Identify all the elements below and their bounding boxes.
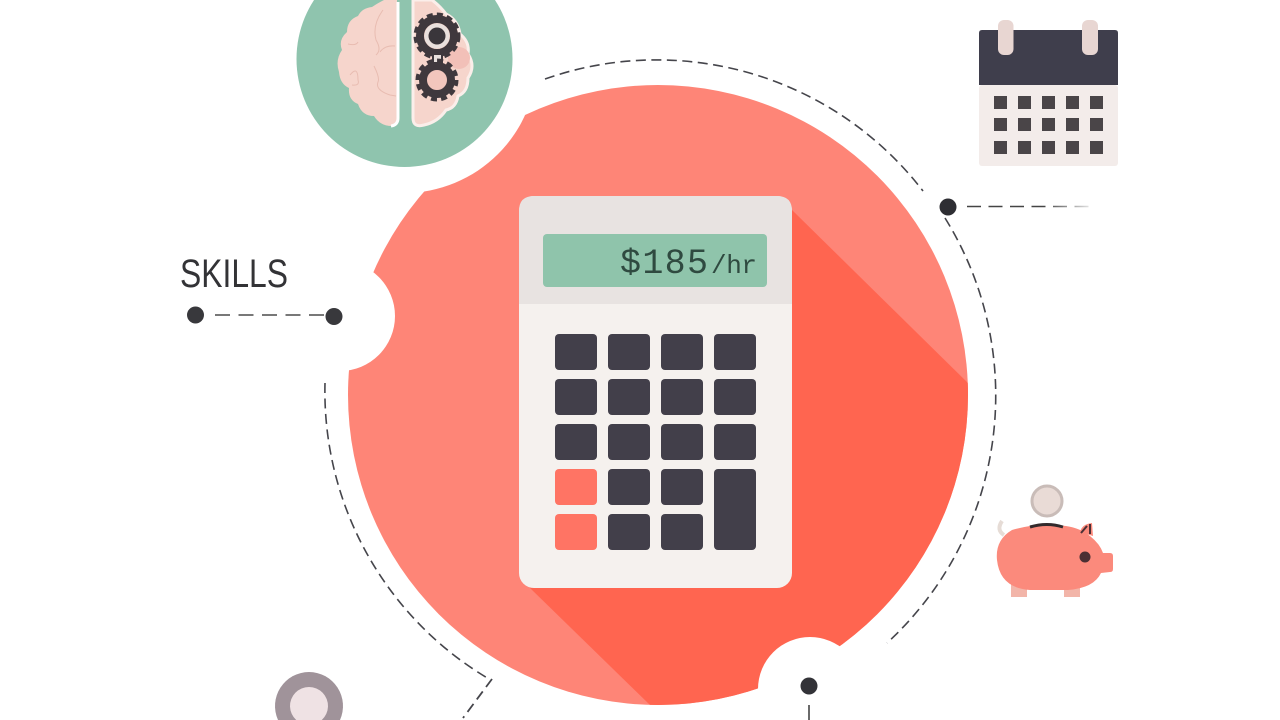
calculator top band — [519, 196, 792, 304]
display value: $185 — [620, 244, 708, 284]
left brain lobe — [338, 0, 397, 126]
calculator drop shadow — [530, 210, 972, 705]
notch: skills — [285, 261, 395, 371]
keypad — [555, 334, 756, 550]
calculator — [519, 196, 792, 588]
icon: brain with gears — [296, 0, 512, 167]
pig body — [997, 525, 1113, 590]
notch: brain — [271, 0, 537, 193]
lower gear — [418, 60, 456, 100]
bottom connector — [800, 678, 818, 720]
infographic canvas — [182, 0, 1118, 720]
left lobe highlight — [391, 2, 398, 126]
right lobe shaded patch — [448, 47, 470, 69]
upper gear — [416, 14, 458, 58]
main coral circle — [348, 85, 972, 705]
calculator body — [519, 196, 792, 588]
display value: /hr — [711, 251, 757, 281]
icon: calendar — [979, 20, 1118, 166]
eye — [1080, 552, 1090, 562]
calendar connector — [940, 198, 1095, 216]
legs — [1011, 584, 1027, 597]
right brain lobe — [413, 0, 472, 126]
coin — [1032, 486, 1062, 516]
skills connector — [187, 306, 342, 325]
gear connector — [433, 54, 442, 63]
tail — [999, 521, 1004, 535]
heading: skills: SKILLS — [180, 252, 288, 296]
icon: bottom-left ring — [275, 672, 343, 720]
ear — [1080, 523, 1093, 536]
left lobe folds — [348, 10, 396, 96]
icon: piggy bank with coin — [997, 486, 1113, 597]
coin slot — [1030, 524, 1063, 527]
notch: bottom — [758, 637, 862, 720]
dashed orbit ring — [325, 60, 996, 718]
display — [543, 234, 767, 287]
